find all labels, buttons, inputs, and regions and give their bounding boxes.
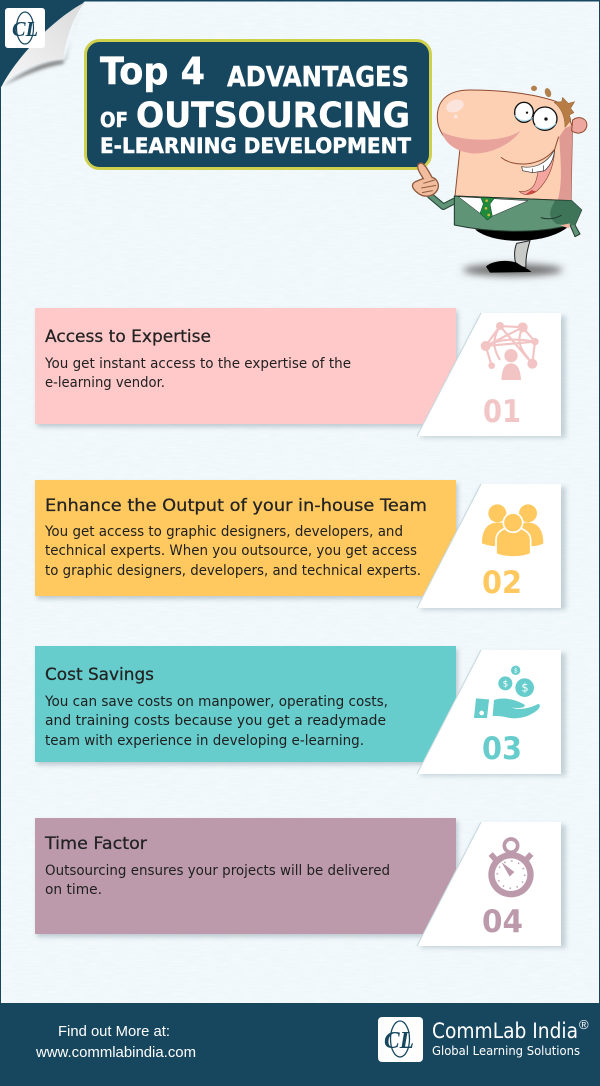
icon: hand with coins: $ bbox=[503, 680, 508, 690]
company name: ® bbox=[579, 1017, 589, 1032]
title box: E-LEARNING DEVELOPMENT bbox=[100, 134, 412, 158]
body text: and training costs because you get a readymade bbox=[45, 713, 386, 729]
heading: Access to Expertise bbox=[45, 327, 211, 347]
corner page curl with logo bbox=[0, 0, 86, 88]
panel: 02 enhance output bbox=[35, 480, 566, 610]
heading: Time Factor bbox=[44, 834, 147, 854]
body text: You can save costs on manpower, operating costs, bbox=[44, 694, 388, 710]
body text bbox=[44, 694, 388, 749]
body text: Outsourcing ensures your projects will be delivered bbox=[45, 863, 390, 879]
title box: Top 4 bbox=[100, 50, 205, 93]
body text: to graphic designers, developers, and technical experts. bbox=[45, 563, 421, 579]
number 03: 03 bbox=[482, 731, 522, 767]
company name: Global Learning Solutions bbox=[432, 1044, 580, 1058]
icon: hand with coins bbox=[474, 666, 540, 718]
icon: footer CL logo bbox=[378, 1017, 423, 1062]
icon: CL logo: CL bbox=[12, 17, 38, 41]
icon: network over person bbox=[481, 322, 539, 380]
icon: hand with coins: $ bbox=[521, 681, 529, 695]
heading: Enhance the Output of your in-house Team bbox=[45, 496, 427, 516]
body text: team with experience in developing e-learning. bbox=[45, 733, 364, 749]
find out more text bbox=[35, 1023, 196, 1061]
body text: technical experts. When you outsource, you get access bbox=[45, 543, 417, 559]
icon: group of people bbox=[482, 504, 543, 557]
find out more text: Find out More at: bbox=[58, 1023, 170, 1040]
body text bbox=[45, 863, 390, 898]
find out more text: www.commlabindia.com bbox=[35, 1044, 196, 1061]
panel: 01 access to expertise bbox=[35, 308, 566, 438]
title box: ADVANTAGES bbox=[227, 60, 409, 93]
heading: Cost Savings bbox=[45, 665, 154, 685]
body text bbox=[44, 356, 351, 391]
title box bbox=[86, 40, 430, 168]
title box: OF bbox=[100, 108, 128, 132]
number 04: 04 bbox=[482, 904, 523, 940]
number 01: 01 bbox=[483, 394, 521, 430]
body text: You get access to graphic designers, developers, and bbox=[44, 524, 403, 540]
body text: on time. bbox=[45, 882, 102, 898]
number 02: 02 bbox=[482, 565, 522, 601]
title box: OUTSOURCING bbox=[136, 96, 410, 136]
cartoon businessman pointing bbox=[412, 86, 587, 276]
panel: 04 time factor bbox=[35, 818, 566, 948]
icon: hand with coins: $ bbox=[514, 668, 518, 675]
icon: stopwatch bbox=[488, 839, 534, 897]
body text bbox=[44, 524, 421, 579]
icon: footer CL logo: CL bbox=[384, 1028, 414, 1054]
panel: 03 cost savings bbox=[35, 646, 566, 776]
company name bbox=[432, 1017, 589, 1058]
body text: You get instant access to the expertise of the bbox=[44, 356, 351, 372]
company name: CommLab India bbox=[432, 1019, 578, 1043]
body text: e-learning vendor. bbox=[45, 375, 165, 391]
footer bar bbox=[0, 1003, 600, 1086]
